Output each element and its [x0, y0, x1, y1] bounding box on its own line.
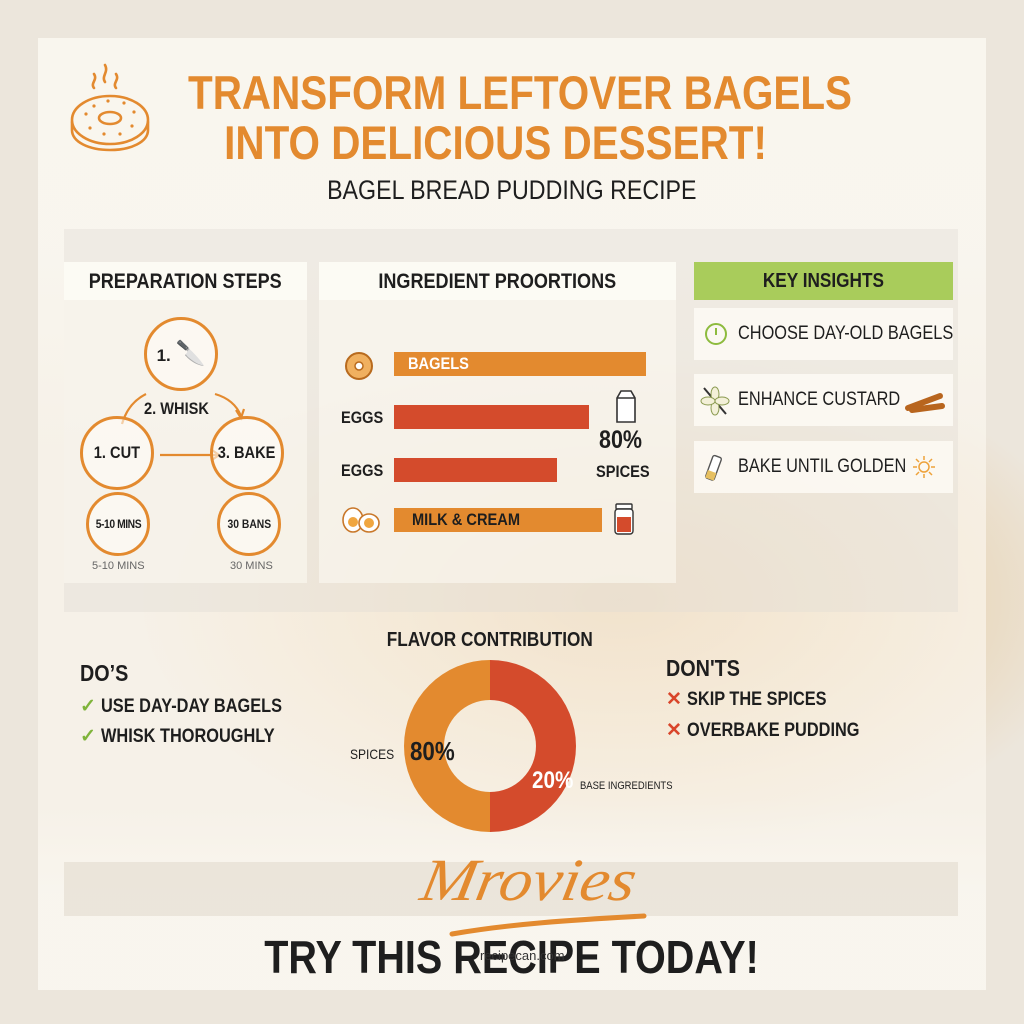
bar: milk & cream: [394, 508, 602, 532]
step circle cut: 1. CUT: [94, 443, 140, 462]
heading: key insights: KEY INSIGHTS: [763, 270, 884, 292]
do item 2: ✓: [80, 726, 96, 747]
dont item 2: OVERBAKE PUDDING: [687, 720, 860, 741]
icon: shaker: [705, 454, 722, 481]
title: TRANSFORM LEFTOVER BAGELS: [188, 66, 852, 119]
insight 3: [694, 441, 953, 493]
bar: bagels: BAGELS: [408, 354, 469, 373]
dont item 1: SKIP THE SPICES: [687, 689, 827, 710]
heading: ingredient proportions: [319, 262, 676, 300]
do item 2: WHISK THOROUGHLY: [101, 726, 275, 747]
logo script: Mrovies: [416, 847, 642, 913]
watermark: recipecan.com: [480, 948, 565, 963]
step circle bake: 3. BAKE: [218, 443, 276, 462]
do item 1: USE DAY-DAY BAGELS: [101, 696, 282, 717]
stat 80% spices: 80%: [599, 426, 642, 454]
step circle knife: [144, 317, 218, 391]
icon: eggs: [342, 507, 380, 533]
chart: flavor contribution donut: 80%: [410, 736, 455, 766]
chart: flavor contribution donut: BASE INGREDIENTS: [580, 780, 673, 792]
step circle bake: [210, 416, 284, 490]
panel: ingredient proportions: SPICES: [596, 462, 650, 481]
icon: vanilla flower: [700, 386, 730, 416]
step circle cut: [80, 416, 154, 490]
insight 3: BAKE UNTIL GOLDEN: [738, 456, 906, 477]
time circle 2: [217, 492, 281, 556]
insight 2: [694, 374, 953, 426]
arrows: [121, 393, 245, 460]
panel: ingredient proportions: [319, 262, 676, 583]
middle band: [64, 229, 958, 612]
icon: bagel small: [345, 352, 373, 380]
chart: flavor contribution donut: [350, 629, 673, 832]
insight 1: [694, 308, 953, 360]
time labels: 5-10 MINS: [92, 560, 145, 572]
bottom band: [64, 862, 958, 916]
do item 1: ✓: [80, 696, 96, 717]
bar: bagels: [394, 352, 646, 376]
icon: sun: [913, 456, 935, 478]
heading: ingredient proportions: INGREDIENT PROORTIONS: [379, 270, 616, 293]
insight 2: ENHANCE CUSTARD: [738, 389, 900, 410]
heading: preparation steps: [64, 262, 307, 300]
step label whisk: 2. WHISK: [144, 399, 209, 418]
title: [188, 66, 852, 169]
step circle knife: 1. 🔪: [157, 340, 205, 367]
bar: milk & cream: MILK & CREAM: [412, 510, 520, 529]
title: INTO DELICIOUS DESSERT!: [225, 116, 767, 169]
bar: eggs 2: [394, 458, 557, 482]
panel: preparation steps: [64, 262, 307, 583]
heading: preparation steps: PREPARATION STEPS: [89, 270, 282, 293]
bar: eggs 1: [394, 405, 589, 429]
panel: dos: [80, 660, 282, 747]
icon: bagel: [70, 64, 150, 152]
time circle 1: [86, 492, 150, 556]
dont item 1: ✕: [666, 689, 682, 710]
label base 20%: 20%: [532, 767, 573, 794]
heading: key insights: [694, 262, 953, 300]
dont item 2: ✕: [666, 720, 682, 741]
heading: flavor contribution: FLAVOR CONTRIBUTION: [387, 629, 593, 651]
icon: cinnamon: [905, 393, 945, 413]
subtitle: BAGEL BREAD PUDDING RECIPE: [327, 175, 697, 205]
label eggs 2: EGGS: [341, 461, 383, 480]
icon: clock: [705, 323, 727, 345]
time circle 1: 5-10 MINS: [95, 517, 141, 531]
label spices 80%: SPICES: [350, 746, 394, 762]
time circle 2: 30 BANS: [227, 517, 271, 531]
icon: milk carton: [616, 390, 636, 423]
insight 1: CHOOSE DAY-OLD BAGELS: [738, 323, 953, 344]
label eggs 1: EGGS: [341, 408, 383, 427]
panel: donts: [666, 655, 860, 741]
panel: preparation steps: 30 MINS: [230, 560, 273, 572]
heading: donts: DON'TS: [666, 655, 740, 681]
icon: jar: [614, 503, 634, 535]
heading: dos: DO’S: [80, 660, 128, 686]
call to action: TRY THIS RECIPE TODAY!: [265, 931, 759, 983]
